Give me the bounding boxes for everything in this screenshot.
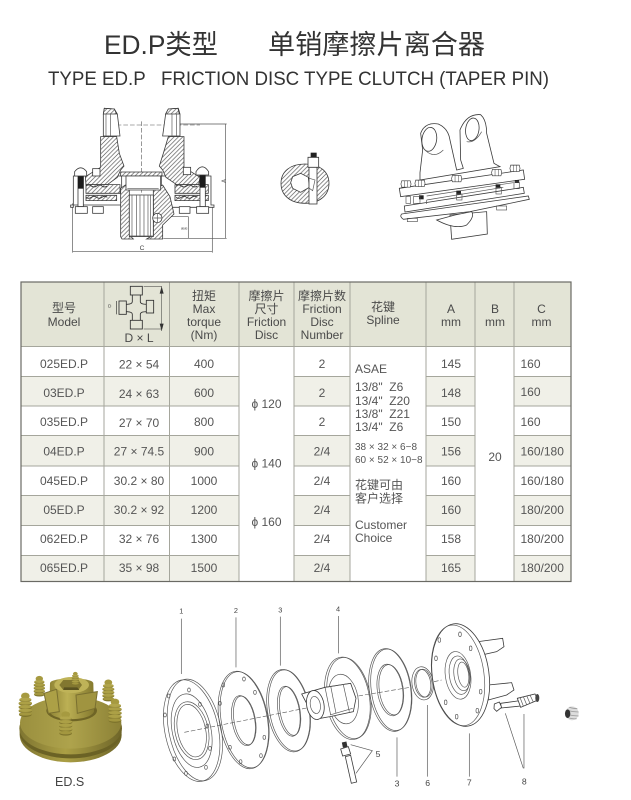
column: friction disc numbers: 2/4: [314, 561, 331, 575]
diagram: taper pin section: [281, 153, 329, 204]
hub section: [121, 185, 133, 239]
column: A values: 148: [441, 386, 461, 400]
header: model: Model: [48, 315, 80, 329]
column: friction disc sizes: ϕ 120: [251, 397, 282, 411]
column: model values: 03ED.P: [43, 386, 85, 400]
header: friction disc number: Disc: [310, 315, 334, 329]
part number leaders and labels: 5: [376, 749, 381, 759]
column: C values: [520, 357, 564, 575]
column: C values: 160: [520, 357, 541, 371]
column: friction disc numbers: 2/4: [314, 532, 331, 546]
specification table: [21, 282, 571, 582]
column: friction disc sizes: ϕ 140: [251, 456, 282, 470]
column: friction disc numbers: 2/4: [314, 503, 331, 517]
table grid: [21, 282, 571, 582]
column: D x L values: 35 × 98: [119, 561, 160, 575]
column: C values: 160: [520, 385, 541, 399]
header: D x L with cross icon: [108, 286, 164, 345]
column: spline options: Customer: [355, 518, 407, 532]
diagram: clutch cross-section with dimensions: [71, 108, 228, 253]
header: friction disc number: Friction: [302, 302, 342, 316]
column: C values: 160/180: [520, 474, 564, 488]
column: A values: 158: [441, 532, 461, 546]
left flange plates: [71, 176, 122, 207]
column: friction disc sizes: [251, 397, 282, 529]
header: A mm: A: [447, 302, 455, 316]
column: friction disc numbers: 2: [319, 386, 326, 400]
header: C mm: mm: [532, 315, 552, 329]
part 6: spacer ring: [410, 665, 436, 701]
column: model values: 035ED.P: [40, 415, 88, 429]
column: D x L values: 24 × 63: [119, 387, 160, 401]
header: max torque: 扭矩: [192, 289, 216, 303]
column: A values: 145: [441, 357, 461, 371]
column: D x L values: 30.2 × 80: [114, 474, 165, 488]
part 4: hub disc: [302, 653, 377, 743]
part 2: steel plate: [211, 667, 276, 773]
column: model values: 025ED.P: [40, 357, 88, 371]
column: spline options: 13/4" Z6: [355, 420, 404, 434]
column: spline options: ASAE: [355, 362, 387, 376]
header: friction disc number: Number: [301, 328, 343, 342]
part number leaders and labels: [336, 605, 527, 788]
column: torque values: 800: [194, 415, 214, 429]
column: A values: 156: [441, 444, 461, 458]
right flange plates: [161, 176, 214, 207]
column: A values: 160: [441, 474, 461, 488]
caption: ED.S: ED.S: [55, 775, 84, 789]
header: max torque: [187, 289, 221, 342]
exploded view: parts 1 to 3: 1: [179, 607, 183, 616]
header: B mm: [485, 302, 505, 329]
header: friction disc number: [298, 288, 346, 342]
header: B mm: mm: [485, 315, 505, 329]
header: max torque: torque: [187, 315, 221, 329]
column: torque values: 400: [194, 357, 214, 371]
diagram: clutch 3D view: [399, 115, 529, 239]
column: A values: 160: [441, 503, 461, 517]
column: torque values: 1300: [191, 532, 218, 546]
column: friction disc numbers: [314, 357, 331, 575]
column: D x L values: 32 × 76: [119, 532, 160, 546]
header: A mm: [441, 302, 461, 329]
column: A values: [441, 357, 461, 575]
column: torque values: 1200: [191, 503, 218, 517]
column: D x L values: 27 × 74.5: [114, 444, 165, 458]
exploded view: parts 4 to 8: [302, 605, 579, 788]
part 3: friction disc: [364, 646, 417, 734]
table header background: [21, 282, 571, 346]
part 5: taper pin: [341, 742, 372, 783]
part 7: yoke flange: [425, 620, 514, 730]
part 3: friction disc: [261, 666, 317, 755]
column: spline options: 13/8" Z21: [355, 407, 410, 421]
header: max torque: Max: [193, 302, 215, 316]
exploded view: parts 1 to 3: [155, 606, 317, 787]
column: spline options: 客户选择: [355, 490, 403, 506]
column: spline options: 60 × 52 × 10−8: [355, 455, 423, 466]
column: spline options: 38 × 32 × 6−8: [355, 442, 417, 453]
column: model values: [40, 357, 88, 575]
header: friction disc size: 摩擦片: [248, 288, 285, 303]
part number leaders and labels: 3: [395, 778, 400, 788]
part number leaders and labels: 7: [467, 777, 472, 787]
part 1: flange ring: [155, 674, 231, 787]
column: spline options: [355, 362, 423, 545]
exploded view: parts 1 to 3: 2: [234, 606, 238, 615]
column: D x L values: 27 × 70: [119, 416, 160, 430]
column: spline options: 13/8" Z6: [355, 380, 404, 394]
header: A mm: mm: [441, 315, 461, 329]
diagram: clutch cross-section with dimensions: A: [222, 179, 228, 183]
header: friction disc size: 尺寸: [254, 302, 279, 316]
column: D x L values: 22 × 54: [119, 358, 160, 372]
column: model values: 05ED.P: [43, 503, 85, 517]
header: B mm: B: [491, 302, 499, 316]
column: C values: 160/180: [520, 444, 564, 458]
part number leaders and labels: 8: [522, 777, 527, 787]
column: model values: 062ED.P: [40, 532, 88, 546]
part number leaders and labels: 4: [336, 605, 340, 614]
header: C mm: C: [537, 302, 546, 316]
column: spline options: 13/4" Z20: [355, 394, 410, 408]
column: friction disc sizes: ϕ 160: [251, 515, 282, 529]
exploded view: parts 1 to 3: 3: [278, 606, 282, 615]
column: A values: 150: [441, 415, 461, 429]
column: friction disc numbers: 2: [319, 357, 326, 371]
header: D x L with cross icon: D × L: [124, 331, 154, 345]
column: C values: 180/200: [520, 532, 564, 546]
column: C values: 180/200: [520, 503, 564, 517]
header: friction disc number: 摩擦片数: [298, 288, 346, 303]
column: D x L values: [114, 358, 165, 575]
part 8: bolt and spring: [494, 694, 539, 768]
header: friction disc size: Friction: [247, 315, 286, 329]
column: C values: 180/200: [520, 561, 564, 575]
column: torque values: [191, 357, 218, 575]
column: friction disc numbers: 2: [319, 415, 326, 429]
header: spline: 花键: [371, 299, 395, 314]
column: torque values: 1500: [191, 561, 218, 575]
header: spline: [366, 299, 400, 327]
small spare spring: [565, 706, 579, 720]
column: B value: 20: [488, 450, 502, 464]
column: model values: 04ED.P: [43, 444, 85, 458]
subtitle: English heading: TYPE ED.P FRICTION DISC TYPE CLUTCH (TAPER PIN): [48, 68, 549, 90]
column: torque values: 900: [194, 444, 214, 458]
header: max torque: (Nm): [191, 328, 217, 342]
header: C mm: [532, 302, 552, 329]
title: Chinese heading: [104, 30, 485, 60]
column: A values: 165: [441, 561, 461, 575]
header: D x L with cross icon: D: [108, 303, 112, 308]
header: friction disc size: Disc: [255, 328, 278, 342]
diagram: clutch cross-section with dimensions: ææ: [181, 227, 188, 231]
friction pack: [86, 185, 120, 193]
title: Chinese heading: ED.P类型: [104, 30, 218, 60]
table outer border: [21, 282, 571, 582]
part number leaders and labels: 6: [425, 778, 430, 788]
column: C values: 160: [520, 415, 541, 429]
diagram: clutch cross-section with dimensions: C: [140, 245, 145, 252]
alternating row shading: [21, 376, 571, 582]
header: friction disc size: [247, 288, 286, 342]
bolts: [78, 173, 83, 207]
column: friction disc numbers: 2/4: [314, 474, 331, 488]
column: model values: 045ED.P: [40, 474, 88, 488]
header: model: [48, 301, 80, 329]
column: torque values: 1000: [191, 474, 218, 488]
column: spline options: Choice: [355, 531, 393, 545]
column: spline options: 花键可由: [355, 477, 403, 492]
header: spline: Spline: [366, 313, 400, 327]
column: friction disc numbers: 2/4: [314, 444, 331, 458]
photo: ED.S clutch: [19, 672, 122, 762]
header: model: 型号: [52, 301, 76, 315]
title: Chinese heading: 单销摩擦片离合器: [268, 30, 485, 60]
column: D x L values: 30.2 × 92: [114, 503, 165, 517]
column: model values: 065ED.P: [40, 561, 88, 575]
column: torque values: 600: [194, 386, 214, 400]
